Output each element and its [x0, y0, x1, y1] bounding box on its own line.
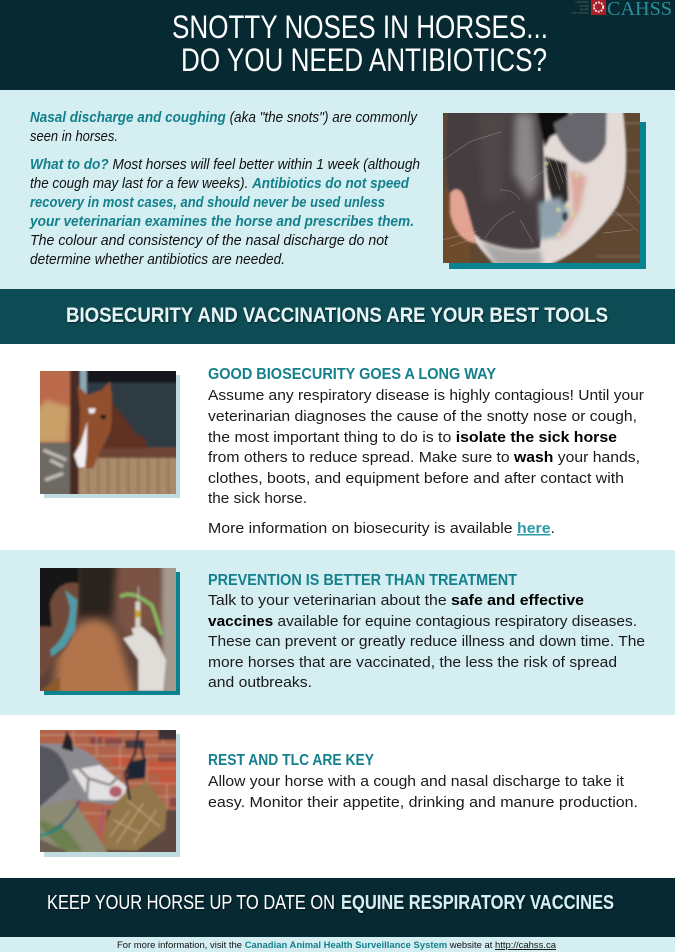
footer	[0, 937, 675, 952]
text: good biosecurity: More information on biosecurity is available here.	[208, 521, 555, 537]
panel: intro	[0, 90, 675, 289]
CAHSS logo	[572, 0, 672, 20]
text: prevention: and outbreaks.	[208, 675, 312, 691]
banner: biosecurity and vaccinations: BIOSECURITY AND VACCINATIONS ARE YOUR BEST TOOLS	[66, 304, 608, 327]
intro text: recovery in most cases, and should never be used unless	[30, 195, 385, 211]
panel: prevention	[0, 550, 675, 715]
photo: vaccination syringe	[30, 560, 187, 700]
text: prevention: PREVENTION IS BETTER THAN TREATMENT	[208, 572, 517, 589]
call to action banner	[0, 878, 675, 937]
title	[172, 9, 548, 78]
text: rest and TLC: Allow your horse with a cough and nasal discharge to take it	[208, 774, 624, 790]
intro text: the cough may last for a few weeks). Antibiotics do not speed	[30, 176, 409, 192]
text: good biosecurity: GOOD BIOSECURITY GOES A LONG WAY	[208, 366, 497, 383]
panel: good biosecurity	[0, 344, 675, 550]
text: rest and TLC: easy. Monitor their appetite, drinking and manure production.	[208, 795, 638, 811]
CAHSS logo: Animal	[579, 4, 589, 8]
title: SNOTTY NOSES IN HORSES...	[172, 9, 548, 45]
CAHSS logo: Surveillance	[572, 11, 589, 15]
intro text: seen in horses.	[30, 129, 118, 145]
CAHSS logo: Health	[580, 8, 589, 12]
text: good biosecurity: Assume any respiratory disease is highly contagious! Until your	[208, 388, 644, 404]
photo: horse eating hay	[30, 720, 187, 860]
intro text: What to do? Most horses will feel better within 1 week (although	[30, 157, 420, 173]
CAHSS logo: Canadian	[575, 0, 589, 4]
intro text	[29, 110, 420, 268]
photo: horse in stable	[30, 360, 187, 503]
photo: horse nose with discharge	[430, 100, 656, 276]
banner: biosecurity and vaccinations	[0, 289, 675, 344]
text: good biosecurity: from others to reduce spread. Make sure to wash your hands,	[208, 450, 640, 466]
panel: rest and TLC	[0, 715, 675, 878]
intro text: your veterinarian examines the horse and prescribes them.	[29, 214, 414, 230]
text: rest and TLC: REST AND TLC ARE KEY	[208, 752, 375, 769]
text: good biosecurity: clothes, boots, and equipment before and after contact with	[208, 471, 624, 487]
intro text: The colour and consistency of the nasal discharge do not	[30, 233, 389, 249]
text: rest and TLC	[208, 752, 638, 811]
header band	[0, 0, 675, 90]
footer: For more information, visit the Canadian Animal Health Surveillance System website at http://cahss.ca	[117, 940, 557, 951]
text: prevention: These can prevent or greatly reduce illness and down time. The	[208, 634, 645, 650]
text: prevention	[208, 572, 645, 691]
text: good biosecurity: veterinarian diagnoses the cause of the snotty nose or cough,	[208, 409, 637, 425]
text: good biosecurity: the most important thing to do is to isolate the sick horse	[208, 430, 617, 446]
text: good biosecurity	[208, 366, 644, 537]
text: prevention: Talk to your veterinarian about the safe and effective	[208, 593, 584, 609]
text: prevention: more horses that are vaccinated, the less the risk of spread	[208, 655, 617, 671]
text: prevention: vaccines available for equine contagious respiratory diseases.	[208, 614, 637, 630]
call to action banner: KEEP YOUR HORSE UP TO DATE ON	[47, 892, 335, 914]
intro text: determine whether antibiotics are needed.	[30, 252, 285, 268]
call to action banner: EQUINE RESPIRATORY VACCINES	[341, 892, 614, 914]
intro text: Nasal discharge and coughing (aka "the snots") are commonly	[30, 110, 418, 126]
title: DO YOU NEED ANTIBIOTICS?	[181, 42, 547, 78]
text: good biosecurity: the sick horse.	[208, 491, 307, 507]
